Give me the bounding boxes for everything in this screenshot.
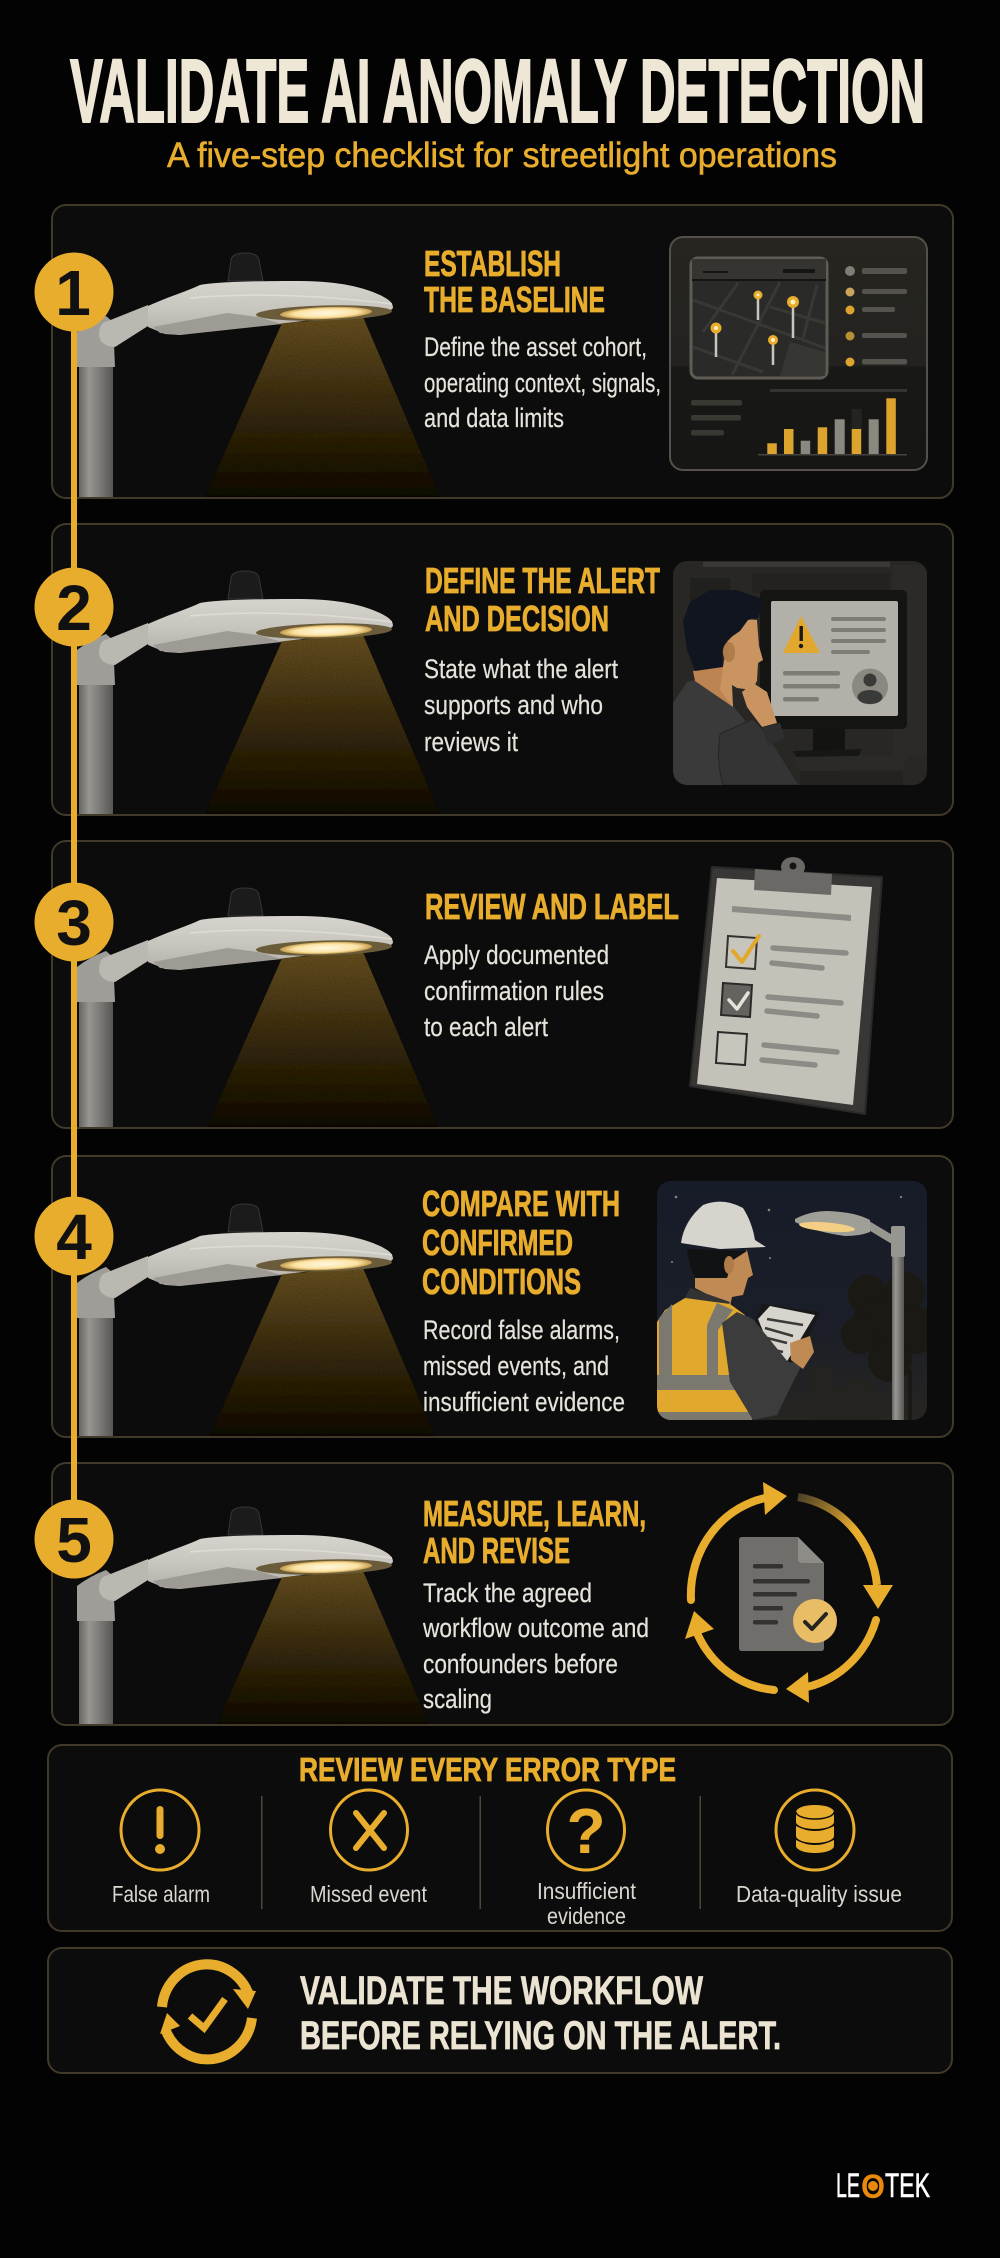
checkbox: empty [716, 1032, 747, 1065]
logo: Leotek: TEK [885, 2167, 930, 2205]
illustration: field inspector at night [657, 1181, 939, 1420]
checkbox: checked gold [726, 936, 759, 969]
number badge 3 [34, 882, 114, 962]
panel: step 2 define the alert and decision [52, 524, 953, 815]
inspector [657, 1202, 820, 1420]
error type: missed event: Missed event [310, 1881, 428, 1907]
heading: step 5: AND REVISE [423, 1530, 570, 1571]
closing text: BEFORE RELYING ON THE ALERT. [300, 2014, 781, 2058]
streetlight 5 [77, 1507, 429, 1724]
logo: Leotek [836, 2167, 930, 2206]
logo: Leotek: LE [836, 2167, 860, 2205]
document with check badge [739, 1537, 837, 1651]
heading: step 3: REVIEW AND LABEL [425, 886, 679, 927]
heading: step 1: ESTABLISH [424, 243, 561, 284]
trees and buildings [841, 1272, 927, 1420]
number badge 5 [34, 1500, 114, 1578]
cycle arrows [685, 1482, 893, 1703]
error type: false alarm [112, 1790, 210, 1907]
heading: step 4: CONDITIONS [422, 1261, 581, 1302]
number badge 4 [34, 1196, 114, 1276]
body text: step 2 [424, 654, 618, 757]
timeline connector [71, 292, 77, 1539]
monitor [760, 590, 907, 758]
body text: step 1 [424, 332, 661, 433]
logo: Leotek: O [861, 2168, 885, 2206]
number badge 2: 2 [56, 572, 92, 644]
streetlight 1 [77, 253, 440, 497]
person [673, 590, 800, 785]
body text: step 5 [422, 1578, 649, 1714]
heading: step 4: COMPARE WITH [422, 1183, 620, 1224]
number badge 1 [34, 252, 114, 332]
streetlight 4 [77, 1204, 435, 1436]
heading: step 2 [425, 560, 660, 639]
subtitle: A five-step checklist for streetlight operations [167, 136, 837, 175]
body text: step 5: confounders before [423, 1649, 618, 1679]
body text: step 2: State what the alert [424, 654, 618, 684]
panel: review every error type [48, 1745, 952, 1931]
body text: step 2: supports and who [424, 690, 603, 720]
street lamp [795, 1211, 905, 1420]
body text: step 1: Define the asset cohort, [424, 332, 647, 362]
illustration: map dashboard [670, 237, 927, 470]
error type: data-quality issue [736, 1790, 902, 1907]
error type: data-quality issue: Data-quality issue [736, 1881, 902, 1907]
body text: step 2: reviews it [424, 727, 518, 757]
heading: step 5: MEASURE, LEARN, [423, 1493, 646, 1534]
closing text: VALIDATE THE WORKFLOW [300, 1969, 703, 2013]
error type: false alarm: False alarm [112, 1881, 210, 1907]
streetlight 2 [77, 571, 440, 814]
closing text [300, 1969, 781, 2058]
panel: step 1 establish the baseline [52, 205, 953, 498]
illustration: operator reviewing alert on monitor [673, 561, 927, 785]
heading: step 5 [423, 1493, 646, 1571]
clip [754, 857, 832, 895]
number badge 3: 3 [56, 887, 92, 959]
body text: step 3: to each alert [424, 1012, 548, 1042]
body text: step 5: Track the agreed [423, 1578, 592, 1608]
illustration: clipboard checklist [690, 857, 882, 1114]
body text: step 5: scaling [423, 1684, 492, 1714]
heading: step 1 [424, 243, 605, 320]
body text: step 3: confirmation rules [424, 976, 604, 1006]
number badge 4: 4 [56, 1201, 92, 1273]
panel: step 4 compare with confirmed conditions [52, 1156, 953, 1437]
error type: insufficient evidence: evidence [547, 1903, 626, 1929]
heading: step 2: DEFINE THE ALERT [425, 560, 660, 601]
list [845, 266, 907, 366]
body text: step 4: missed events, and [423, 1351, 609, 1381]
checkbox: checked grey [721, 983, 752, 1017]
illustration: revision cycle with document [685, 1482, 893, 1703]
panel: step 3 review and label [52, 841, 953, 1128]
panel: step 5 measure, learn, and revise [52, 1463, 953, 1725]
bar chart [691, 389, 907, 456]
body text: step 4: Record false alarms, [423, 1315, 620, 1345]
error type: insufficient evidence [537, 1790, 637, 1929]
number badge 5: 5 [56, 1504, 92, 1576]
body text: step 3: Apply documented [424, 940, 609, 970]
body text: step 1: and data limits [424, 403, 564, 433]
panel: closing statement [48, 1948, 952, 2073]
streetlight 3 [77, 888, 438, 1127]
heading: review every error type: REVIEW EVERY ERROR TYPE [299, 1751, 676, 1788]
body text: step 4 [423, 1315, 625, 1417]
body text: step 4: insufficient evidence [423, 1387, 625, 1417]
heading: step 2: AND DECISION [425, 598, 609, 639]
heading: step 4 [422, 1183, 620, 1302]
number badge 2 [34, 568, 114, 646]
heading: step 4: CONFIRMED [422, 1222, 573, 1263]
error type: missed event [310, 1790, 428, 1907]
error type: insufficient evidence: ? [566, 1795, 606, 1867]
body text: step 3 [424, 940, 609, 1042]
number badge 1: 1 [55, 257, 91, 329]
heading: step 1: THE BASELINE [424, 279, 605, 320]
body text: step 5: workflow outcome and [422, 1613, 649, 1643]
error type: insufficient evidence: Insufficient [537, 1878, 637, 1904]
desk [796, 756, 858, 758]
body text: step 1: operating context, signals, [424, 368, 661, 398]
icon: cycle with checkmark [160, 1964, 256, 2059]
map [691, 258, 827, 378]
